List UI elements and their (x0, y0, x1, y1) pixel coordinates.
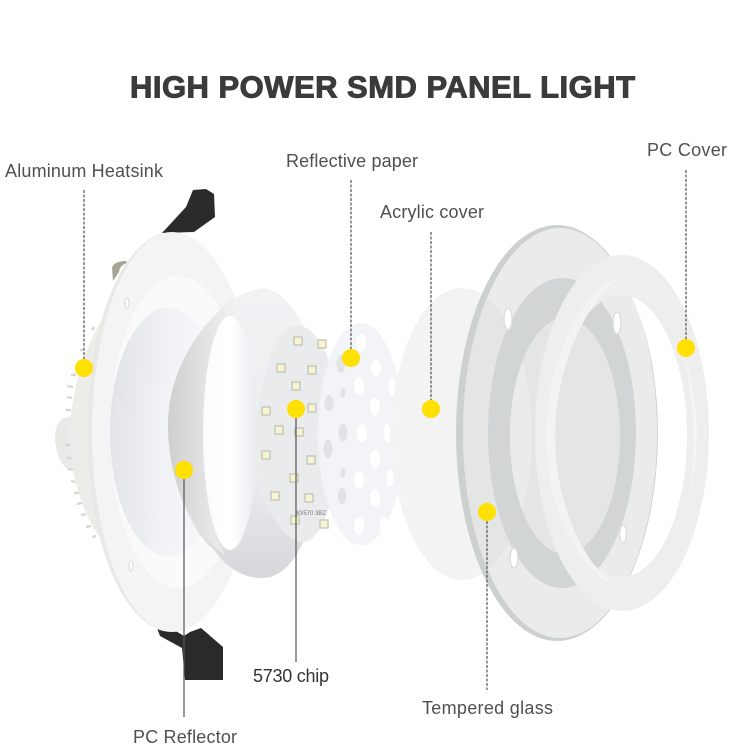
dot: acrylic (422, 400, 440, 418)
glass mount holes (504, 308, 626, 568)
board (255, 325, 340, 542)
component: acrylic cover (392, 288, 532, 580)
component: reflector band (168, 288, 323, 578)
white holes (354, 334, 396, 535)
label: acrylic cover: Acrylic cover (380, 202, 484, 222)
leader lines (84, 170, 686, 717)
paper disc (318, 323, 404, 545)
cover leader (685, 170, 687, 348)
component: LED chip board (255, 325, 340, 542)
glass center (510, 318, 620, 554)
white crescent behind ring (631, 296, 688, 570)
acrylic leader (430, 232, 432, 409)
glass leader (486, 512, 488, 690)
label: aluminum heatsink: Aluminum Heatsink (5, 161, 164, 181)
component: reflective paper (318, 323, 404, 545)
dot: paper (342, 349, 360, 367)
socket (55, 415, 84, 472)
component: mounting clip top (162, 189, 215, 233)
component: aluminum heatsink (55, 261, 127, 545)
band opening (203, 316, 257, 550)
marker dots (75, 339, 695, 521)
board marking: 30/570 3BZ (295, 511, 326, 517)
ring (535, 255, 709, 611)
band grey strip (168, 300, 240, 555)
dot: glass (478, 503, 496, 521)
title: HIGH POWER SMD PANEL LIGHT (130, 70, 635, 104)
component: tempered glass (456, 225, 658, 641)
heatsink leader (83, 190, 85, 368)
grey holes (324, 355, 348, 504)
acrylic through center (510, 366, 522, 509)
LED chips (262, 337, 328, 528)
reflector leader (183, 470, 185, 717)
heatsink body (70, 322, 125, 545)
label: tempered glass: Tempered glass (422, 698, 553, 718)
component: mounting clip bottom (157, 625, 223, 680)
ring inner lip (546, 278, 620, 586)
heatsink fins (65, 327, 96, 537)
label: PC reflector: PC Reflector (133, 727, 237, 747)
ring right lip (680, 345, 697, 520)
dot: reflector (175, 461, 193, 479)
housing left rim (87, 232, 172, 632)
glass edge (456, 225, 658, 641)
grey ring (488, 278, 636, 588)
component: PC reflector housing (87, 232, 257, 632)
component: PC cover ring (535, 255, 709, 611)
housing inner opening (110, 276, 246, 588)
dot: chip (287, 400, 305, 418)
inner shaded cone (110, 308, 226, 556)
label: 5730 chip: 5730 chip (253, 666, 329, 686)
dot: heatsink (75, 359, 93, 377)
screw holes (125, 298, 129, 308)
band outer shell (168, 288, 323, 578)
acrylic seen through glass (392, 288, 532, 580)
bolt (112, 261, 127, 281)
dot: cover (677, 339, 695, 357)
chip leader (295, 409, 297, 662)
label: PC cover: PC Cover (647, 140, 727, 160)
glass face (463, 228, 657, 638)
label: reflective paper: Reflective paper (286, 151, 418, 171)
housing outer flange (87, 232, 257, 632)
paper leader (350, 180, 352, 358)
